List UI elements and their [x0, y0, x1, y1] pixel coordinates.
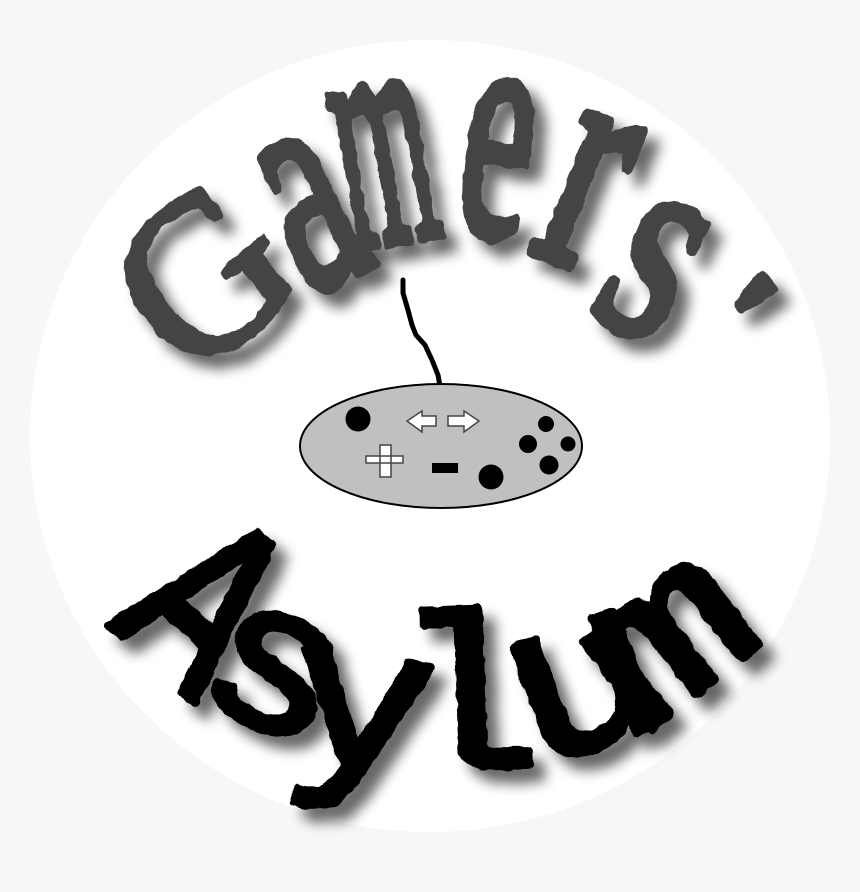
heading: Asylum: m — [534, 500, 810, 788]
heading: Asylum: u — [469, 539, 699, 835]
heading: Asylum: y — [273, 584, 449, 840]
controller cord — [403, 280, 440, 386]
heading: Asylum: s — [165, 538, 382, 810]
d-pad — [366, 445, 403, 477]
controller body — [300, 384, 582, 508]
action buttons — [519, 416, 576, 474]
heading: Gamers': ' — [644, 242, 812, 391]
left arrow — [407, 411, 436, 432]
left stick button — [346, 406, 370, 432]
select bar — [432, 463, 458, 473]
game controller — [300, 280, 582, 508]
heading: Gamers': a — [188, 9, 407, 358]
heading: Gamers' — [62, 0, 812, 421]
heading: Asylum: A — [56, 468, 336, 761]
lower button — [478, 464, 504, 490]
heading: Gamers': s — [553, 86, 782, 403]
right arrow — [448, 411, 479, 432]
heading: Asylum — [56, 468, 810, 840]
heading: Asylum: l — [391, 583, 545, 837]
heading: Gamers': G — [62, 130, 341, 421]
